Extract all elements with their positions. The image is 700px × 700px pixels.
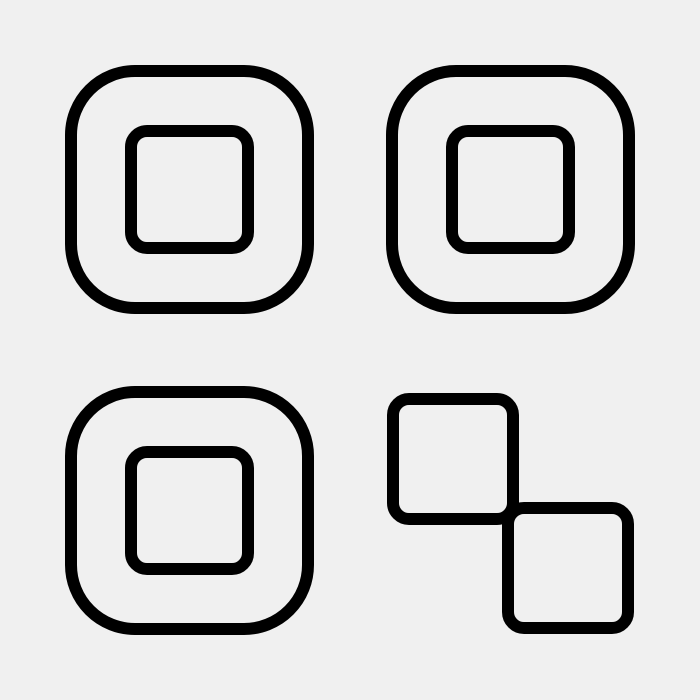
finder pattern: top-right bbox=[392, 71, 629, 308]
finder pattern: top-left bbox=[71, 71, 308, 308]
small squares: bottom-right bbox=[393, 399, 628, 628]
finder pattern: bottom-left bbox=[71, 392, 308, 629]
